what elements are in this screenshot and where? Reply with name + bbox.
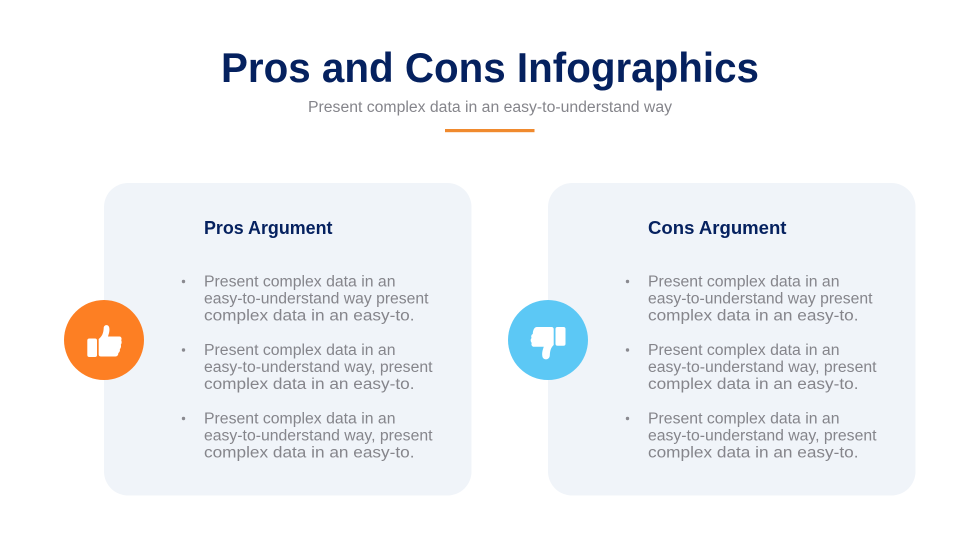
cons heading: Cons Argument	[648, 218, 786, 238]
pros bullet 3: complex data in an easy-to.	[204, 444, 414, 462]
pros bullet 2: easy-to-understand way, present	[204, 359, 433, 376]
pros panel background	[104, 183, 472, 496]
pros heading: Pros Argument	[204, 218, 332, 238]
cons bullet 3: easy-to-understand way, present	[648, 428, 877, 444]
cons bullet 2	[626, 342, 877, 393]
cons bullet 1	[626, 274, 873, 324]
cons bullet 3: Present complex data in an	[648, 410, 840, 428]
pros bullet 3: Present complex data in an	[204, 410, 396, 428]
cons bullet 3	[626, 410, 877, 462]
icon: thumbs down	[508, 300, 588, 380]
cons bullet 3: complex data in an easy-to.	[648, 444, 858, 462]
title: Pros and Cons Infographics	[221, 44, 759, 91]
cons bullet 2: easy-to-understand way, present	[648, 359, 877, 376]
pros bullet 1	[182, 274, 429, 324]
pros bullet 2: complex data in an easy-to.	[204, 376, 414, 393]
cons bullet 1: complex data in an easy-to.	[648, 308, 858, 324]
cons bullet 2: complex data in an easy-to.	[648, 376, 858, 393]
cons bullet 1: Present complex data in an	[648, 274, 840, 290]
subtitle: Present complex data in an easy-to-understand way	[308, 99, 672, 116]
pros bullet 3: easy-to-understand way, present	[204, 428, 433, 444]
cons bullet 2: Present complex data in an	[648, 342, 840, 359]
title accent bar	[445, 129, 534, 132]
panel: pros	[104, 183, 472, 496]
pros bullet 1: Present complex data in an	[204, 274, 396, 290]
pros bullet 3	[182, 410, 433, 462]
panel: cons	[548, 183, 916, 496]
pros bullet 1: complex data in an easy-to.	[204, 308, 414, 324]
cons bullet 1: easy-to-understand way present	[648, 290, 873, 308]
pros bullet 2: Present complex data in an	[204, 342, 396, 359]
cons panel background	[548, 183, 916, 496]
pros bullet 2	[182, 342, 433, 393]
icon: thumbs up	[64, 300, 144, 380]
pros bullet 1: easy-to-understand way present	[204, 290, 429, 308]
